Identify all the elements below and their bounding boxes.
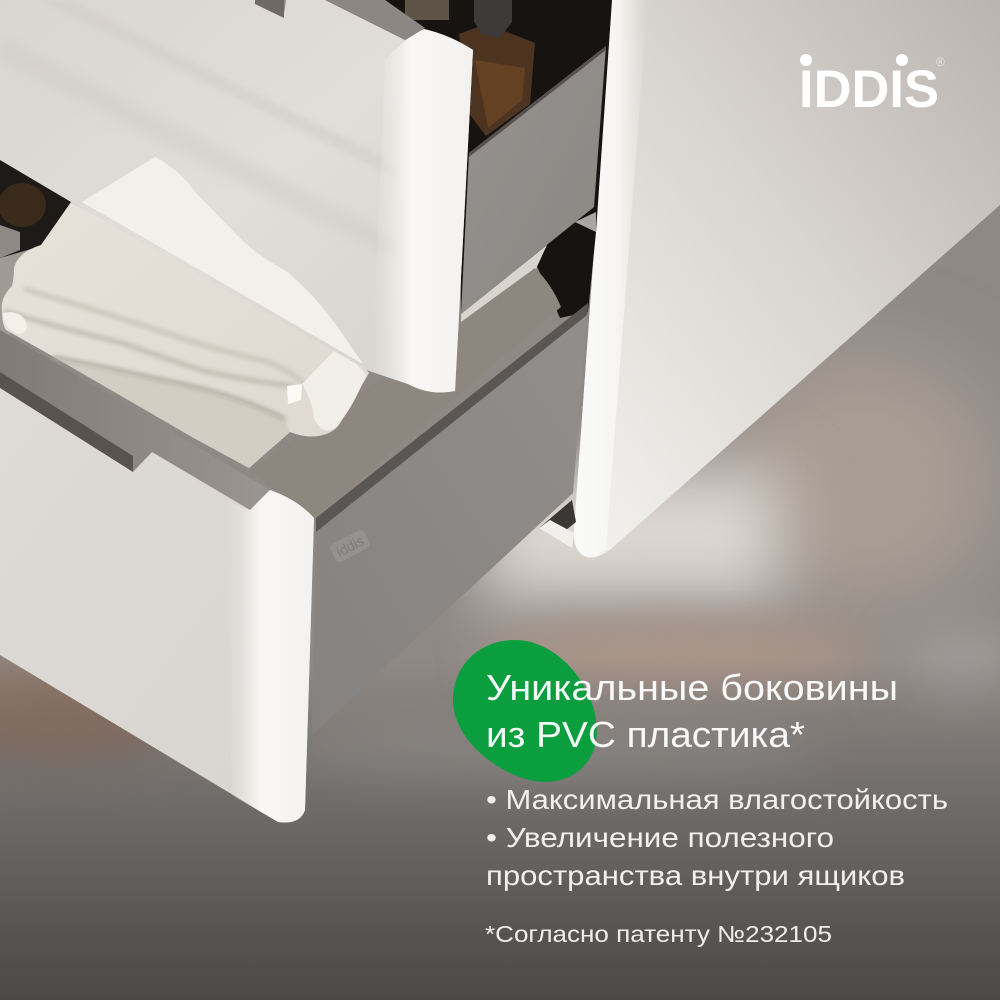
footnote: *Согласно патенту №232105 <box>485 921 832 947</box>
benefits list: • Увеличение полезного <box>486 822 834 853</box>
benefits list <box>486 784 948 891</box>
heading: из PVC пластика* <box>486 714 805 755</box>
heading <box>486 667 898 755</box>
benefits list: пространства внутри ящиков <box>486 860 905 891</box>
cabinet body <box>574 0 1000 558</box>
towel reflection on the upper drawer <box>82 157 363 364</box>
metal handle of lower drawer <box>0 330 270 510</box>
towel <box>2 202 369 468</box>
lower drawer front <box>0 388 314 822</box>
green blob <box>453 640 597 782</box>
upper drawer front <box>0 0 473 392</box>
icon: bottle <box>405 0 535 136</box>
embossed side logo: iddis <box>334 532 366 560</box>
logo: IDDIS <box>799 60 939 119</box>
dark corner with small bottle <box>0 155 85 335</box>
lower drawer interior <box>249 212 596 518</box>
upper drawer interior and side <box>385 0 612 318</box>
metal handle pieces on the top drawer <box>255 0 425 40</box>
lower drawer side panel <box>312 303 588 735</box>
heading: Уникальные боковины <box>486 667 898 708</box>
embossed side logo <box>329 528 371 564</box>
benefits list: • Максимальная влагостойкость <box>486 784 948 815</box>
logo: ® <box>936 55 945 69</box>
